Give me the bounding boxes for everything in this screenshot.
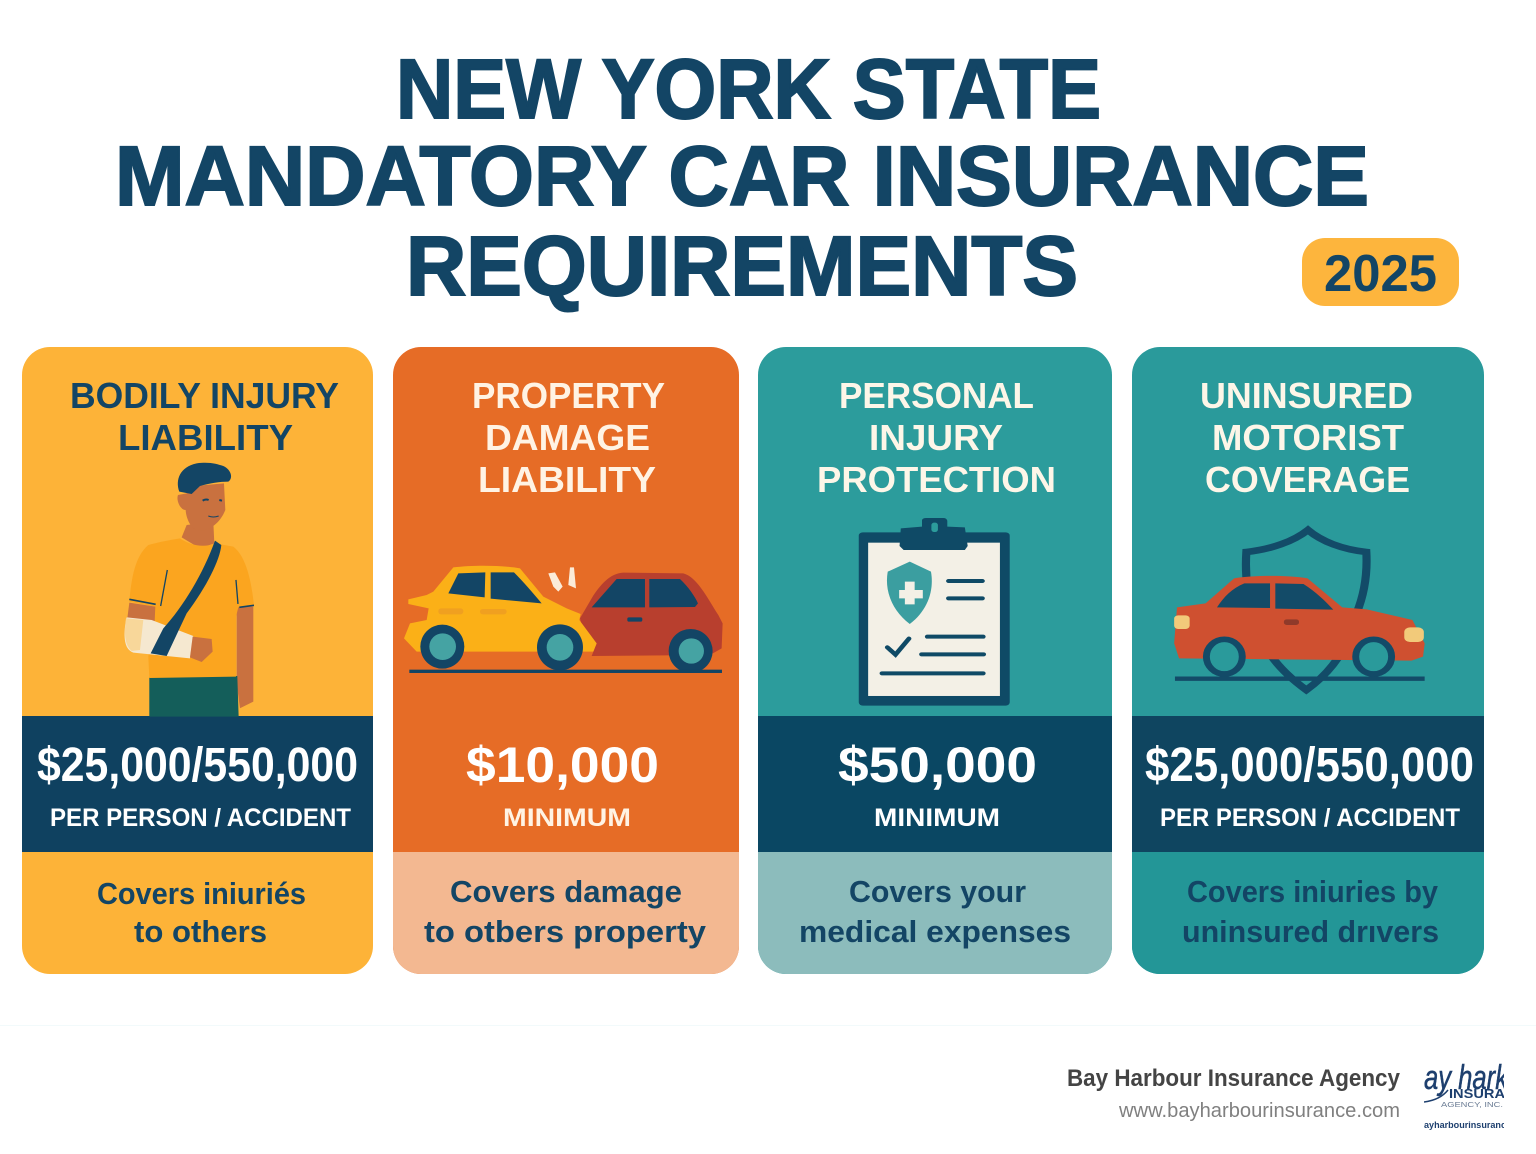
logo: cropped Bay Harbour mark: ayharbourinsuranc [1424, 1120, 1506, 1130]
heading: bodily injury liability [70, 375, 339, 458]
title: NEW YORK STATE [396, 42, 1101, 136]
label: per person / accident: PER PERSON / ACCIDENT [50, 804, 351, 832]
logo: cropped Bay Harbour mark: INSURA [1449, 1086, 1506, 1101]
description: uninsured motorist: uninsured drıvers [1182, 914, 1439, 949]
heading: uninsured motorist coverage: COVERAGE [1205, 459, 1410, 500]
heading: personal injury protection: PROTECTION [817, 459, 1056, 500]
description: property damage: to otbers property [424, 914, 707, 949]
footer agency name: Bay Harbour Insurance Agency [1067, 1065, 1401, 1092]
description: bodily injury [97, 876, 306, 949]
heading: uninsured motorist coverage: UNINSURED [1200, 375, 1413, 416]
icon: two cars colliding [404, 566, 723, 673]
heading: property damage liability [472, 375, 665, 500]
label: minimum: MINIMUM [874, 804, 1000, 832]
logo: cropped Bay Harbour mark: AGENCY, INC. [1441, 1102, 1503, 1109]
amount: property damage: $10,000 [466, 737, 659, 793]
footer website: www.bayharbourinsurance.com [1118, 1100, 1400, 1122]
heading: uninsured motorist coverage: MOTORIST [1212, 417, 1404, 458]
description: property damage [424, 874, 707, 949]
description: property damage: Covers damage [450, 874, 682, 909]
heading: property damage liability: DAMAGE [485, 417, 650, 458]
title [115, 42, 1369, 313]
label: per person / accident: PER PERSON / ACCIDENT [1160, 804, 1460, 832]
heading: uninsured motorist coverage [1200, 375, 1413, 500]
heading: property damage liability: LIABILITY [478, 459, 656, 500]
heading: personal injury protection: INJURY [869, 417, 1003, 458]
amount: personal injury protection: $50,000 [838, 737, 1037, 793]
description: personal injury protection: Covers your [849, 874, 1026, 909]
description: uninsured motorist: Covers iniuries by [1187, 874, 1439, 909]
panel: uninsured motorist coverage [1132, 347, 1484, 974]
description: personal injury protection: medical expenses [799, 914, 1071, 949]
panel: personal injury protection [758, 347, 1112, 974]
icon: man with arm in sling [125, 463, 254, 717]
heading: personal injury protection [817, 375, 1056, 500]
description: uninsured motorist [1182, 874, 1439, 949]
heading: bodily injury liability: BODILY INJURY [70, 375, 339, 416]
title: REQUIREMENTS [406, 219, 1078, 313]
description: bodily injury: to others [134, 914, 267, 949]
panel: bodily injury liability [22, 347, 373, 974]
icon: medical clipboard [859, 518, 1010, 706]
description: personal injury protection [799, 874, 1071, 949]
year badge: 2025 [1324, 245, 1437, 303]
logo: cropped Bay Harbour mark [1424, 1064, 1504, 1130]
amount: bodily injury: $25,000/550,000 [37, 739, 358, 792]
panel: property damage liability [393, 347, 739, 974]
year badge [1302, 238, 1459, 306]
label: minimum: MINIMUM [503, 804, 631, 832]
logo: cropped Bay Harbour mark: ay hark [1424, 1059, 1510, 1097]
heading: bodily injury liability: LIABILITY [118, 417, 293, 458]
amount: uninsured motorist: $25,000/550,000 [1145, 739, 1474, 792]
icon: car with shield [1174, 530, 1425, 690]
description: bodily injury: Covers iniuriés [97, 876, 306, 911]
heading: property damage liability: PROPERTY [472, 375, 665, 416]
title: MANDATORY CAR INSURANCE [115, 129, 1369, 223]
heading: personal injury protection: PERSONAL [839, 375, 1034, 416]
